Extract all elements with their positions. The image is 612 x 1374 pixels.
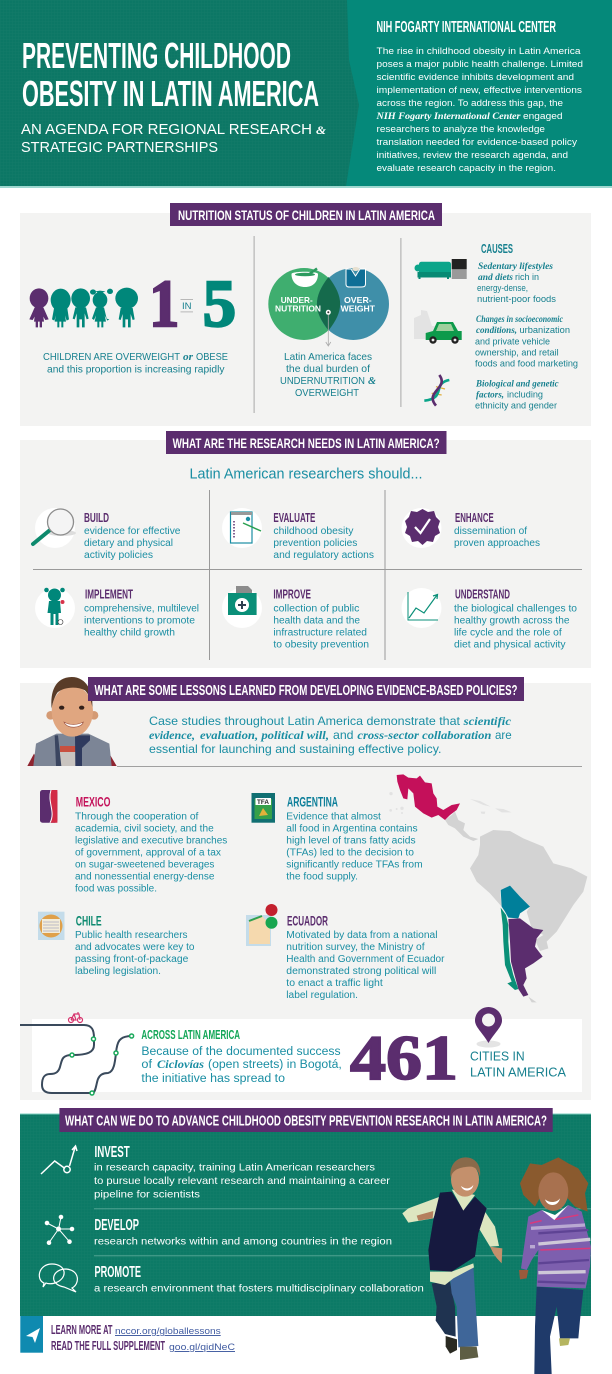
item: understand: life cycle and the role of [454,628,562,638]
chart: venn diagram of dual burden: OVER- [344,295,372,305]
cause: biological and genetic factors: including [507,390,543,400]
item: implement: IMPLEMENT [85,586,133,602]
icon: bowl [292,268,318,287]
text block: case studies intro: essential for launching and sustaining effective policy. [149,742,441,756]
cause: socioeconomic conditions: conditions, [476,326,517,336]
icon: traffic light sandwich label [246,904,278,946]
item: build: BUILD [84,510,109,525]
text block: case studies intro: scientific [463,714,512,728]
action: invest: to pursue locally relevant research and maintaining a career [94,1175,391,1187]
icon: bike route [20,1012,134,1095]
title: OBESITY IN LATIN AMERICA [22,73,319,114]
item: improve: collection of public [273,604,360,614]
panel: lessons learned [20,677,591,1100]
cause: socioeconomic conditions: and private vehicle [475,336,550,346]
case: Argentina: (TFAs) led to the decision to [286,848,415,858]
case: Ecuador: label regulation. [286,990,358,1001]
item: build [33,508,181,561]
case: Ecuador: nutrition survey, the Ministry of [286,942,425,953]
item: improve: to obesity prevention [273,640,369,650]
heading: causes: CAUSES [481,241,513,256]
footer: learn more links: LEARN MORE AT [51,1323,113,1337]
Argentina [508,918,543,997]
intro text block [375,46,583,174]
icon: car and smog [414,310,462,344]
case: Chile [38,912,195,977]
caption: dual burden: Latin America faces [284,351,372,363]
icon: soda can [40,790,57,823]
text block: case studies intro: evaluation, political will, [200,728,329,742]
chart: venn diagram of dual burden: NUTRITION [275,304,321,314]
item: understand: the biological challenges to [454,604,578,614]
item: enhance: ENHANCE [455,510,494,525]
case: Chile: passing front-of-package [75,954,189,965]
statistic: 1 in 5 [149,267,236,341]
item: improve: health data and the [273,616,361,626]
heading banner: lessons learned [88,677,524,701]
icon: shirt [346,267,366,287]
text block: case studies intro: cross-sector collaboration [357,728,492,742]
item: implement [35,586,199,638]
case: Argentina: all food in Argentina contains [286,824,418,834]
case: Mexico: legislative and executive branches [75,836,227,846]
case: Ecuador: Motivated by data from a national [286,930,438,941]
item: evaluate [222,508,374,561]
cause: sedentary lifestyles: and diets [478,273,513,283]
item: understand: healthy growth across the [454,616,570,626]
item: evaluate: EVALUATE [273,510,316,525]
statistic: 1 in 5: 5 [203,267,236,341]
action: promote: a research environment that fosters multidisciplinary collaboration [94,1282,424,1294]
text block: case studies intro: Case studies throughout Latin America demonstrate that [149,714,461,728]
cause: biological and genetic factors [475,380,559,410]
item: implement: comprehensive, multilevel [84,604,199,614]
caption: children overweight or obese: or [183,352,193,363]
cause: sedentary lifestyles [477,262,556,304]
caption: children overweight or obese: OBESE [196,352,228,363]
case: Ecuador: Health and Government of Ecuador [286,954,445,965]
icon: food label [38,912,64,940]
icon: sofa and television [414,259,467,279]
case: Ecuador [246,904,445,1001]
intro text block: translation needed for evidence-based policy [376,137,577,148]
subtitle: AN AGENDA FOR REGIONAL RESEARCH [21,121,312,138]
title [22,35,319,114]
callout: across Latin America: of [141,1059,153,1071]
case: Ecuador: to enact a traffic light [286,978,383,989]
action: invest: INVEST [94,1144,130,1161]
case: Mexico: academia, civil society, and the [75,824,214,834]
item: implement: healthy child growth [84,628,175,638]
heading banner: nutrition status: NUTRITION STATUS OF CHILDREN IN LATIN AMERICA [178,207,435,223]
Chile [501,908,518,990]
case: Argentina: Evidence that almost [286,812,381,822]
cause: sedentary lifestyles: rich in [515,272,539,282]
intro text block: poses a major public health challenge. Limited [376,59,583,70]
text block: case studies intro [149,714,512,756]
action: invest: pipeline for scientists [94,1188,200,1200]
item: enhance: dissemination of [454,526,527,537]
case: Argentina: ARGENTINA [287,794,338,810]
action: invest [41,1144,391,1200]
heading banner: nutrition status [170,203,442,226]
text block: case studies intro: and [333,728,354,742]
case: Mexico: food was possible. [75,884,157,894]
item: implement: interventions to promote [84,616,196,626]
item: build: evidence for effective [84,526,181,537]
case: Mexico: on sugar-sweetened beverages [75,860,215,870]
title: PREVENTING CHILDHOOD [22,35,291,76]
item: improve: IMPROVE [273,586,311,602]
callout: across Latin America: CITIES IN [470,1050,525,1064]
subtitle: & [316,123,327,137]
case: Argentina: significantly reduce TFAs from [286,860,423,870]
icon: TFA food bag [252,793,275,823]
footer: learn more links [20,1316,235,1353]
case: Mexico: and nonessential energy-dense [75,872,215,882]
cause: sedentary lifestyles: nutrient-poor foods [477,294,556,304]
intro text block: The rise in childhood obesity in Latin America [376,46,581,57]
statistic: 461: 461 [350,1022,458,1093]
item: enhance [402,508,540,549]
footer: learn more links: goo.gl/qidNeC [169,1342,235,1353]
case: Argentina: high level of trans fatty acids [286,836,416,846]
caption: dual burden: OVERWEIGHT [295,387,360,399]
case: Argentina [252,793,423,882]
icon: growth arrow with coin [41,1146,77,1174]
case: Mexico: of government, approval of a tax [75,848,221,858]
action: promote [39,1264,424,1294]
panel: nutrition status [20,203,591,426]
intro text block: across the region. To address this gap, the [376,98,563,109]
panel: what can we do [20,1108,591,1316]
cause: biological and genetic factors: factors, [476,390,504,400]
intro text block: researchers to analyze the knowledge [376,124,545,135]
item: improve [222,586,369,650]
item: evaluate: childhood obesity [273,526,353,537]
caption: dual burden [280,351,377,399]
callout: across Latin America: (open streets) in Bogotá, [208,1059,342,1071]
cause: biological and genetic factors: ethnicity and gender [475,400,557,410]
item: understand: diet and physical activity [454,640,566,650]
case: Mexico [40,790,227,894]
item: understand [402,586,578,650]
case: Chile: CHILE [76,913,102,929]
map: Latin America [389,774,587,1002]
photo: smiling boy [27,677,117,766]
intro text block: scientific evidence inhibits development and [376,72,574,83]
case: Chile: labeling legislation. [75,966,161,977]
cause: socioeconomic conditions [475,315,578,368]
case: Chile: Public health researchers [75,930,188,941]
case: Mexico: Through the cooperation of [75,812,199,822]
cause: socioeconomic conditions: Changes in socioeconomic [476,315,563,325]
caption: dual burden: UNDERNUTRITION [280,375,365,387]
callout: across Latin America: Ciclovías [157,1059,205,1071]
icon: network [45,1215,74,1244]
subheading: Latin American researchers should... [190,466,422,482]
intro text block: initiatives, review the research agenda, and [376,150,568,161]
Mexico [397,774,460,820]
text block: case studies intro: are [495,728,512,742]
icon: five children silhouettes [29,288,138,327]
action: develop: research networks within and among countries in the region [94,1236,392,1248]
footer: learn more links: nccor.org/globallessons [115,1326,221,1337]
callout: across Latin America [20,1007,582,1095]
action: promote: PROMOTE [94,1264,141,1281]
caption: children overweight or obese [43,352,228,376]
chart: venn diagram of dual burden: UNDER- [281,295,313,305]
callout: across Latin America: Because of the documented success [141,1046,341,1058]
callout: across Latin America: ACROSS LATIN AMERICA [141,1027,240,1042]
intro text block: evaluate research capacity in the region. [376,163,556,174]
statistic: 1 in 5: 1 [149,267,179,341]
item: enhance: proven approaches [454,538,540,549]
item: evaluate: prevention policies [273,538,357,549]
callout: across Latin America: the initiative has spread to [141,1073,285,1085]
intro text block: engaged [523,111,562,122]
Bolivia [501,886,530,918]
intro text block: implementation of new, effective interventions [376,85,582,96]
item: understand: UNDERSTAND [455,586,510,602]
chart: venn diagram of dual burden [268,267,389,346]
icon: map pin [475,1007,502,1048]
item: improve: infrastructure related [273,628,367,638]
case: Argentina: the food supply. [286,872,358,882]
cause: socioeconomic conditions: foods and food marketing [475,358,578,368]
subtitle [21,121,327,156]
photo: running boy [402,1157,502,1360]
caption: dual burden: the dual burden of [286,363,370,375]
chart: venn diagram of dual burden: WEIGHT [341,304,376,314]
cause: sedentary lifestyles: Sedentary lifestyles [478,262,553,272]
footer: learn more links: READ THE FULL SUPPLEMENT [51,1339,165,1353]
panel: research needs [20,431,591,668]
cause: sedentary lifestyles: energy-dense, [477,283,528,293]
icon: DNA helix [424,375,449,406]
item: build: activity policies [84,550,153,561]
cause: biological and genetic factors: Biological and genetic [475,380,559,390]
heading banner: advance research [59,1108,553,1132]
caption: dual burden: & [368,376,377,387]
case: Ecuador: demonstrated strong political will [286,966,436,977]
icon: TFA food bag: TFA [257,800,270,806]
cause: socioeconomic conditions: ownership, and retail [475,348,559,358]
icon: speech bubbles [39,1264,77,1292]
callout: across Latin America: LATIN AMERICA [470,1066,567,1080]
item: evaluate: and regulatory actions [273,550,374,561]
case: Chile: and advocates were key to [75,942,195,953]
intro text block: NIH Fogarty International Center [375,111,521,122]
statistic: 1 in 5: IN [182,301,192,312]
action: develop: DEVELOP [94,1217,139,1234]
case: Mexico: MEXICO [76,794,111,810]
caption: children overweight or obese: and this proportion is increasing rapidly [47,364,224,376]
heading banner: research needs [166,431,446,454]
cause: socioeconomic conditions: urbanization [520,325,570,335]
action: develop [45,1215,392,1248]
case: Ecuador: ECUADOR [287,913,328,929]
subtitle: STRATEGIC PARTNERSHIPS [21,139,218,156]
icon: arrow square [20,1316,43,1353]
caption: children overweight or obese: CHILDREN ARE OVERWEIGHT [43,352,180,363]
heading banner: research needs: WHAT ARE THE RESEARCH NEEDS IN LATIN AMERICA? [173,435,440,451]
item: build: dietary and physical [84,538,173,549]
header banner [0,0,612,188]
photo: running girl [519,1157,591,1374]
text block: case studies intro: evidence, [149,728,195,742]
action: invest: in research capacity, training Latin American researchers [94,1162,375,1174]
